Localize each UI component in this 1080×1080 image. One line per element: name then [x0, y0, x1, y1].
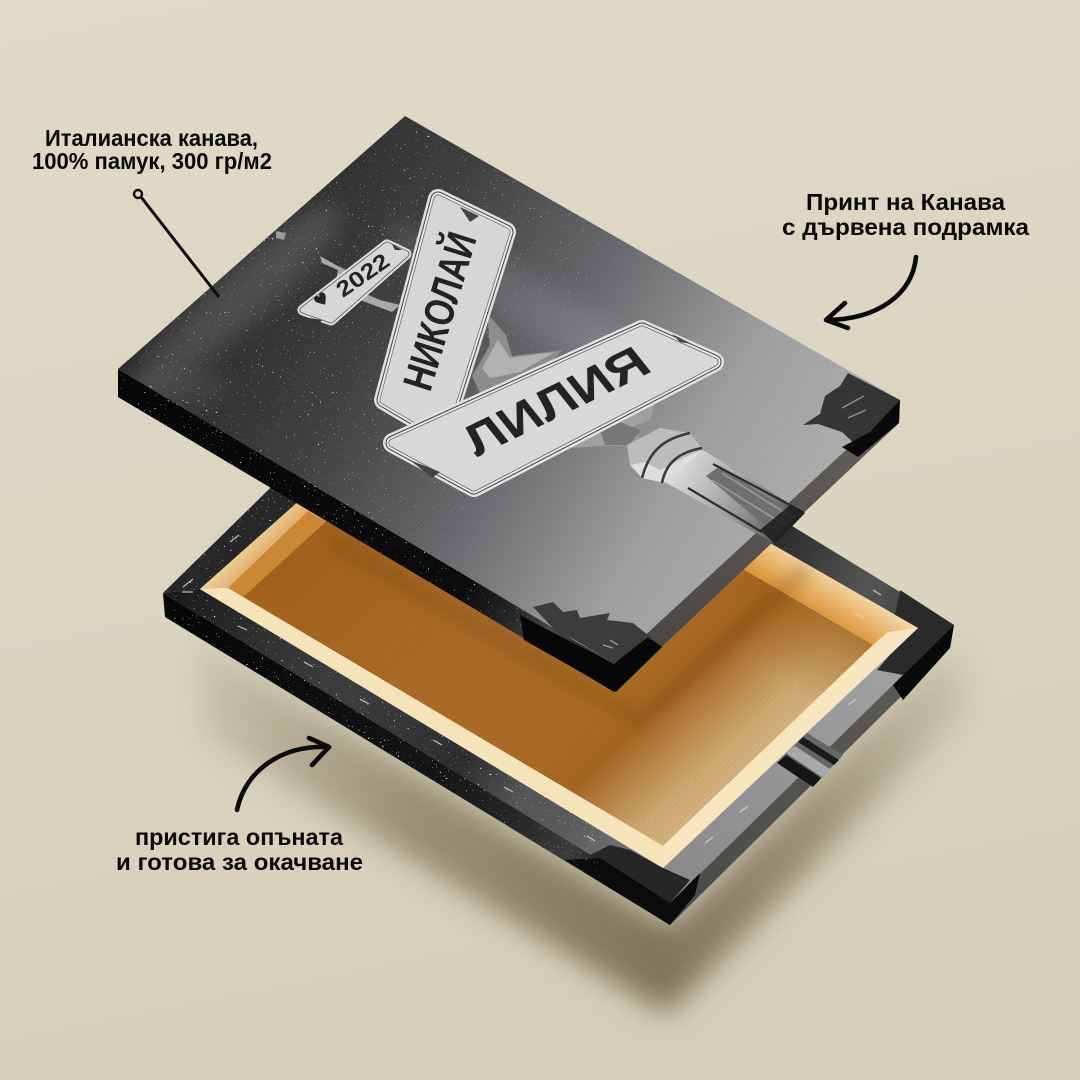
shadow of upper canvas — [330, 530, 815, 730]
folded canvas rim, upper left — [163, 315, 455, 593]
name text: НИКОЛАЙ — [393, 226, 486, 396]
burlap back of canvas — [243, 400, 873, 846]
shadow under lower canvas — [195, 640, 972, 1015]
canvas weave — [118, 116, 900, 664]
tree on frame, right corner — [877, 590, 954, 700]
name text: ЛИЛИЯ — [450, 337, 661, 465]
label text: Италианска канава, — [45, 125, 258, 151]
stars on left side — [118, 374, 534, 628]
tree on frame, bottom corner — [565, 845, 700, 925]
tree silhouette, bottom corner — [520, 602, 662, 692]
speckled stars on frame — [150, 480, 600, 900]
callout: Italian canvas — [32, 125, 272, 297]
tree silhouette, right corner — [803, 373, 900, 457]
left side of frame — [163, 593, 670, 925]
year text: 2022 — [331, 248, 394, 302]
label text: и готова за окачване — [116, 849, 363, 875]
folded canvas rim, lower left — [163, 589, 670, 903]
staples on frame — [182, 535, 881, 843]
callout: arrives stretched — [116, 738, 363, 875]
right side of frame — [670, 625, 954, 925]
panel: lower canvas, back view with stretcher frame — [163, 470, 954, 925]
central bracket of the sign post — [472, 313, 563, 393]
label text — [782, 189, 1029, 240]
wood bar, lower right — [663, 628, 918, 868]
sign: Лилия — [393, 330, 714, 487]
sign: 2022 — [303, 244, 406, 326]
wood bar, upper left — [200, 362, 520, 597]
wood bar, upper right — [455, 362, 918, 645]
folded canvas rim, lower right — [663, 625, 954, 903]
small upper bracket — [276, 231, 400, 312]
label text: Принт на Канава — [806, 189, 1005, 215]
label text — [116, 824, 363, 875]
stripes of the pole on the frame — [777, 733, 843, 787]
label text: 100% памук, 300 гр/м2 — [32, 148, 272, 174]
milky way glow — [127, 201, 614, 411]
left side of canvas — [118, 369, 614, 692]
sign: Николай — [384, 199, 506, 434]
lower bracket and collar of the post — [570, 398, 703, 483]
arrow — [237, 738, 329, 810]
callout: print on canvas — [782, 189, 1029, 328]
canvas face — [118, 116, 900, 664]
post shaft — [665, 450, 805, 544]
folded canvas rim, upper right — [447, 315, 954, 628]
wood bar, lower left — [200, 588, 663, 868]
star field — [124, 118, 667, 588]
label text: с дървена подрамка — [782, 214, 1029, 240]
label text: пристига опъната — [135, 824, 343, 850]
heart on small sign: ♥ — [310, 288, 334, 313]
label text — [32, 125, 272, 174]
right side of canvas — [614, 400, 900, 692]
pointer line with pin — [134, 190, 219, 297]
arrow — [826, 257, 916, 328]
panel: upper canvas, front view — [107, 116, 900, 692]
